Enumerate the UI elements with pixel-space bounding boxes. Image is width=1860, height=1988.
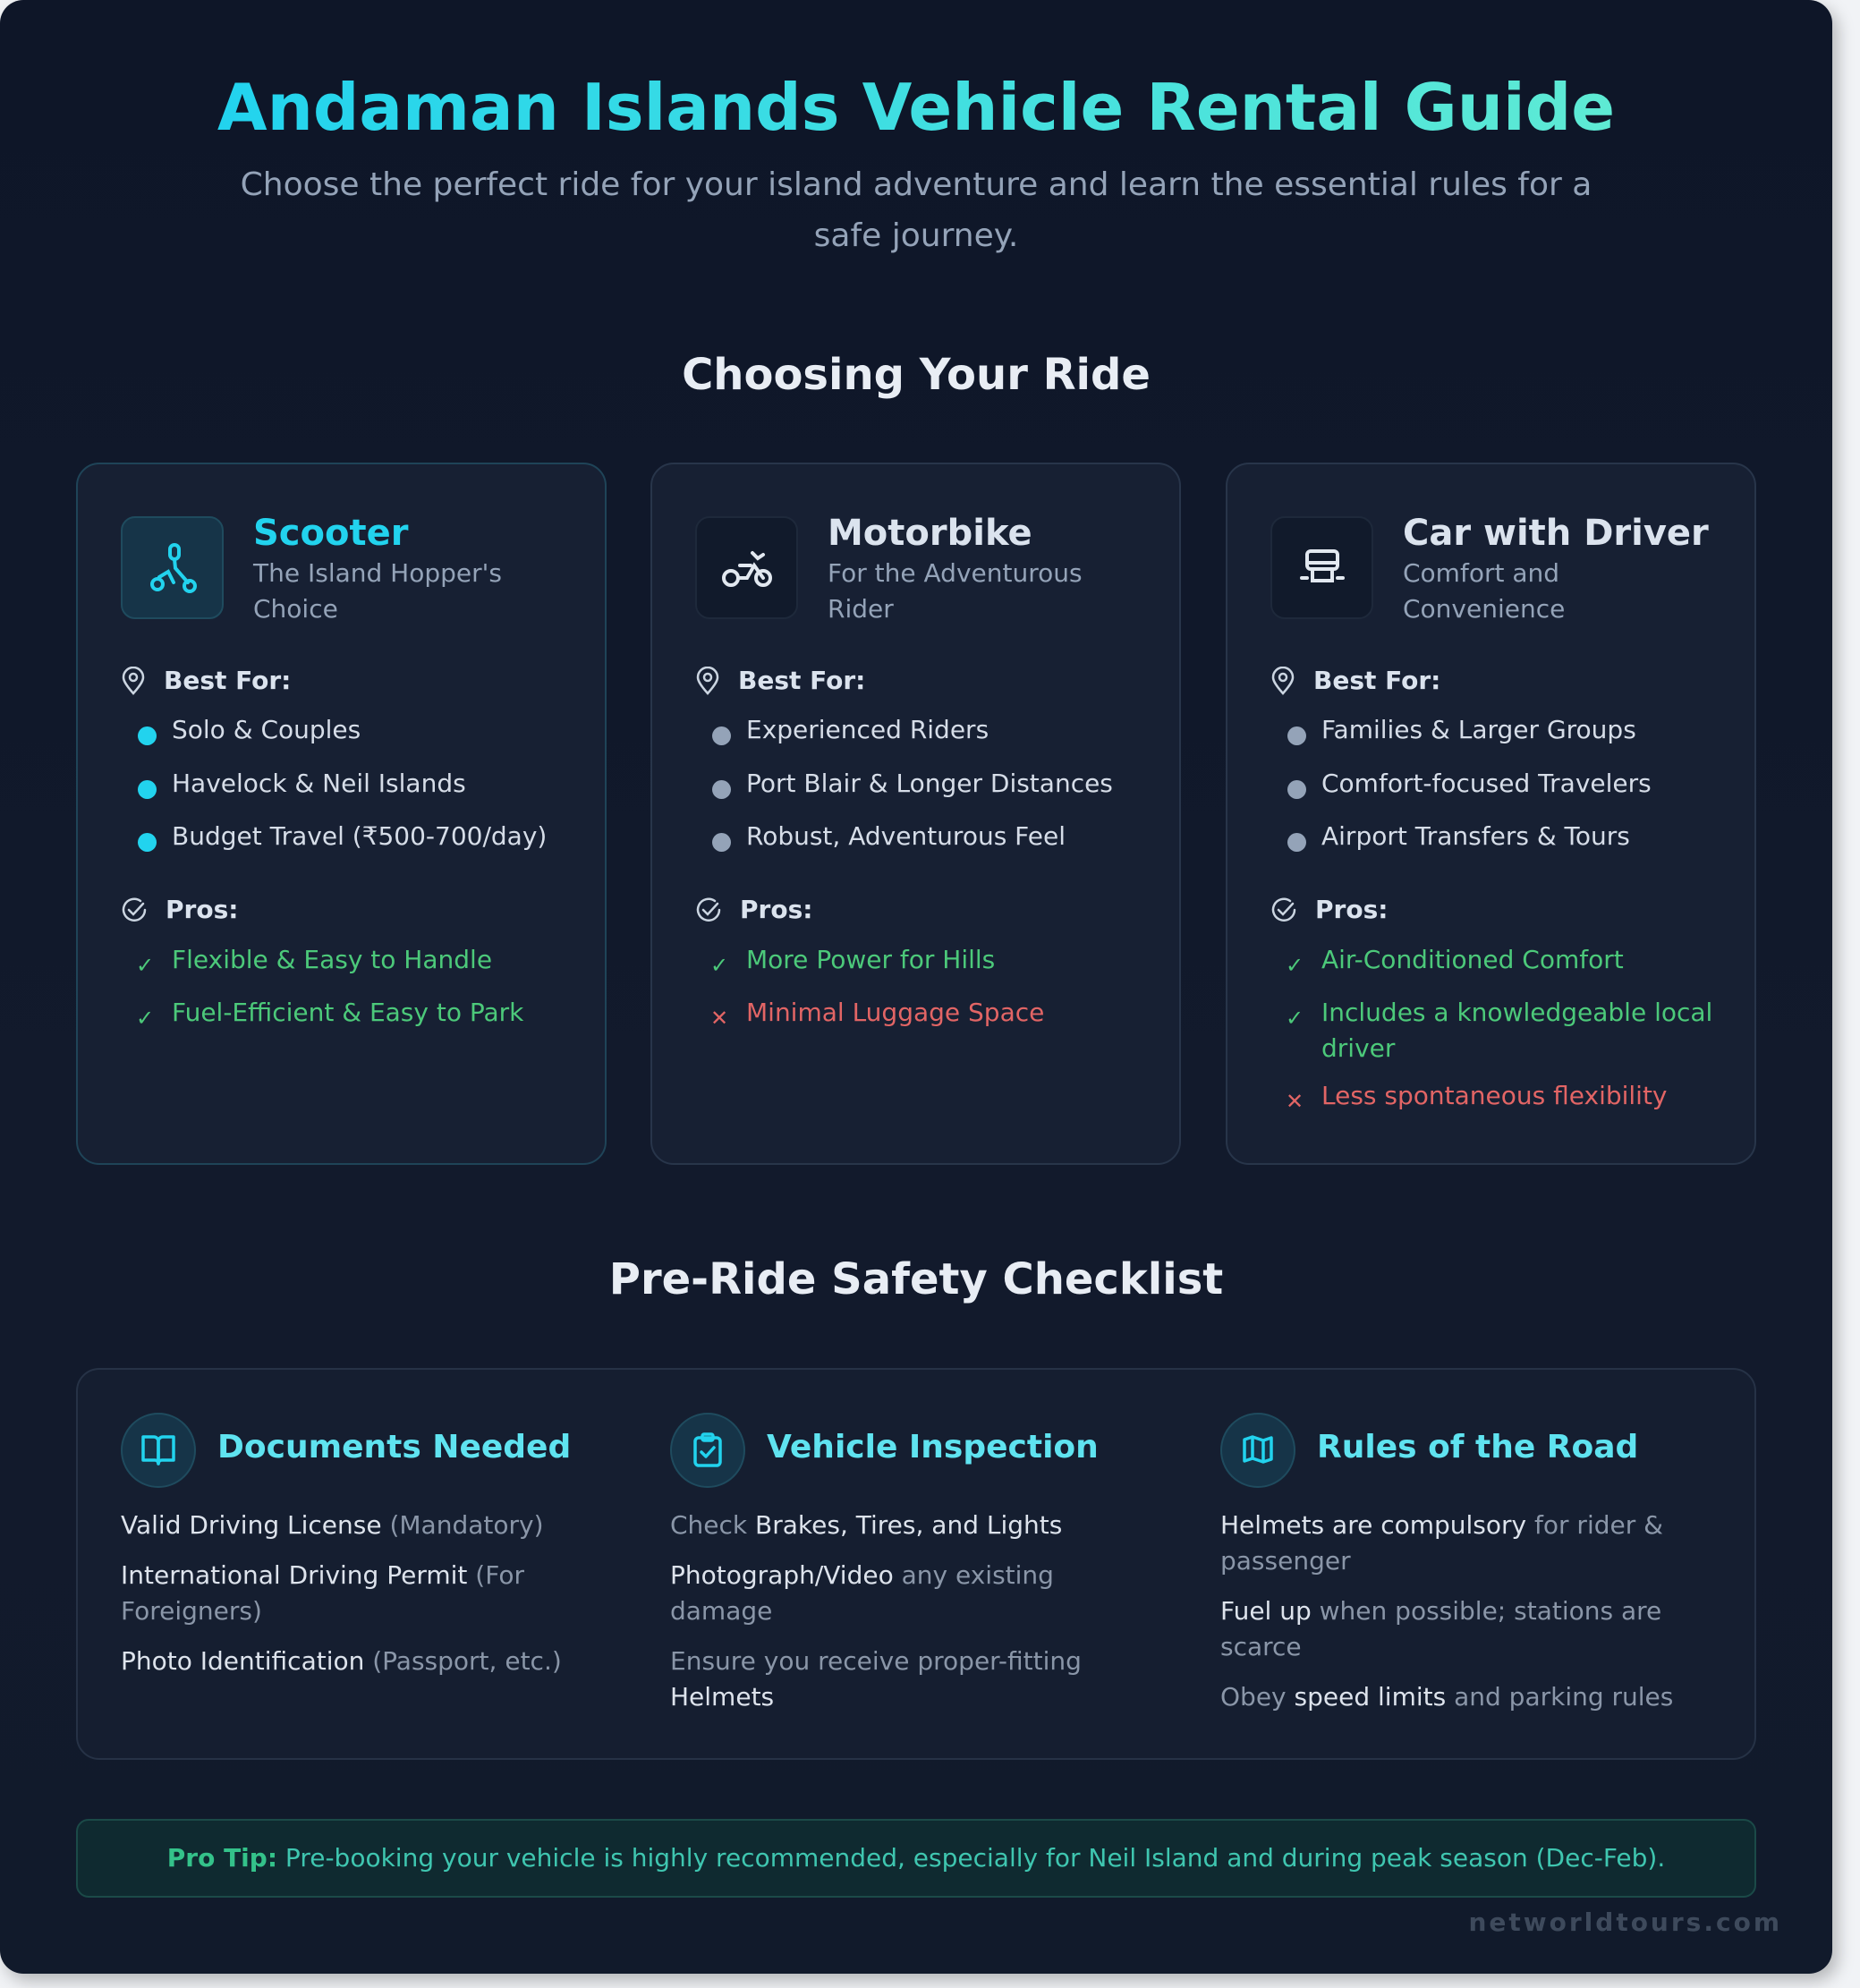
panel: safety checklist: Fuel up when possible; stations are scarce: [1220, 1596, 1661, 1661]
card title: Car with Driver: [1403, 513, 1709, 554]
title: Andaman Islands Vehicle Rental Guide: [217, 70, 1615, 145]
card title: Motorbike: [828, 513, 1032, 554]
icon: car: [1270, 516, 1373, 619]
subtitle: Choose the perfect ride for your island adventure and learn the essential rules for a safe journey.: [241, 166, 1592, 254]
card: car with driver: ✓: [1286, 953, 1304, 978]
best for heading: Best For:: [1313, 666, 1440, 695]
pros heading: [696, 895, 812, 924]
column: rules: [1220, 1413, 1673, 1712]
card: car with driver: Less spontaneous flexibility: [1321, 1081, 1668, 1110]
callout: pro tip: [76, 1819, 1756, 1898]
items: Check Brakes, Tires, and Lights: [670, 1510, 1062, 1540]
card: car with driver: Includes a knowledgeable local driver: [1321, 998, 1712, 1063]
card: motorbike: Port Blair & Longer Distances: [746, 769, 1113, 798]
card title: Scooter: [253, 513, 408, 554]
card subtitle: Comfort and Convenience: [1403, 558, 1565, 624]
card: scooter: ✓: [136, 953, 154, 978]
icon: scooter: [121, 516, 224, 619]
column: documents: [121, 1413, 571, 1676]
list: pros: Flexible & Easy to Handle: [172, 945, 492, 974]
best for heading: Best For:: [164, 666, 291, 695]
heading: Vehicle Inspection: [767, 1429, 1099, 1466]
card: scooter: [76, 463, 607, 1165]
card: scooter: ✓: [136, 1006, 154, 1031]
watermark: networldtours.com: [1468, 1907, 1782, 1937]
heading: Rules of the Road: [1317, 1429, 1638, 1466]
best for heading: Best For:: [738, 666, 865, 695]
panel: safety checklist: [76, 1368, 1756, 1760]
card: motorbike: ✕: [710, 1006, 728, 1031]
items: Valid Driving License (Mandatory): [121, 1510, 544, 1540]
heading: safety checklist: Pre-Ride Safety Checklist: [609, 1254, 1223, 1304]
card: scooter: Fuel-Efficient & Easy to Park: [172, 998, 523, 1027]
pros heading: Pros:: [166, 895, 238, 924]
card: motorbike: Minimal Luggage Space: [746, 998, 1044, 1027]
card: motorbike: ✓: [710, 953, 728, 978]
card: motorbike: [650, 463, 1181, 1165]
column: inspection: [670, 1413, 1099, 1712]
card: scooter: Havelock & Neil Islands: [172, 769, 466, 798]
card: car with driver: ✓: [1286, 1006, 1304, 1031]
card: scooter: Budget Travel (₹500-700/day): [172, 821, 547, 851]
card: car with driver: Comfort-focused Travelers: [1321, 769, 1652, 798]
panel: safety checklist: Ensure you receive proper-fitting Helmets: [670, 1646, 1082, 1712]
pros heading: [1272, 895, 1388, 924]
heading: choosing your ride: Choosing Your Ride: [682, 350, 1151, 400]
panel: safety checklist: Photograph/Video any existing damage: [670, 1560, 1054, 1626]
callout: pro tip: Pro Tip: Pre-booking your vehicle is highly recommended, especially for Neil Island and during peak season (Dec-Feb).: [167, 1843, 1665, 1873]
icon: book: [121, 1413, 196, 1488]
card subtitle: For the Adventurous Rider: [828, 558, 1083, 624]
list: best for: Experienced Riders: [746, 715, 989, 744]
list: best for: Solo & Couples: [172, 715, 361, 744]
card: car with driver: ✕: [1286, 1089, 1304, 1114]
panel: safety checklist: Photo Identification (Passport, etc.): [121, 1646, 562, 1676]
card: motorbike: Robust, Adventurous Feel: [746, 821, 1066, 851]
list: pros: Air-Conditioned Comfort: [1321, 945, 1624, 974]
card: car with driver: Airport Transfers & Tours: [1321, 821, 1630, 851]
icon: motorbike: [695, 516, 798, 619]
pros heading: Pros:: [1315, 895, 1388, 924]
icon: clipboard: [670, 1413, 745, 1488]
list: best for: Families & Larger Groups: [1321, 715, 1636, 744]
panel: safety checklist: International Driving Permit (For Foreigners): [121, 1560, 524, 1626]
icon: map: [1220, 1413, 1295, 1488]
heading: Documents Needed: [217, 1429, 571, 1466]
pros heading: [122, 895, 238, 924]
card subtitle: The Island Hopper's Choice: [253, 558, 502, 624]
items: Helmets are compulsory for rider & passenger: [1220, 1510, 1663, 1576]
card: car with driver: [1226, 463, 1756, 1165]
panel: safety checklist: Obey speed limits and parking rules: [1220, 1682, 1673, 1712]
pros heading: Pros:: [740, 895, 812, 924]
list: pros: More Power for Hills: [746, 945, 995, 974]
